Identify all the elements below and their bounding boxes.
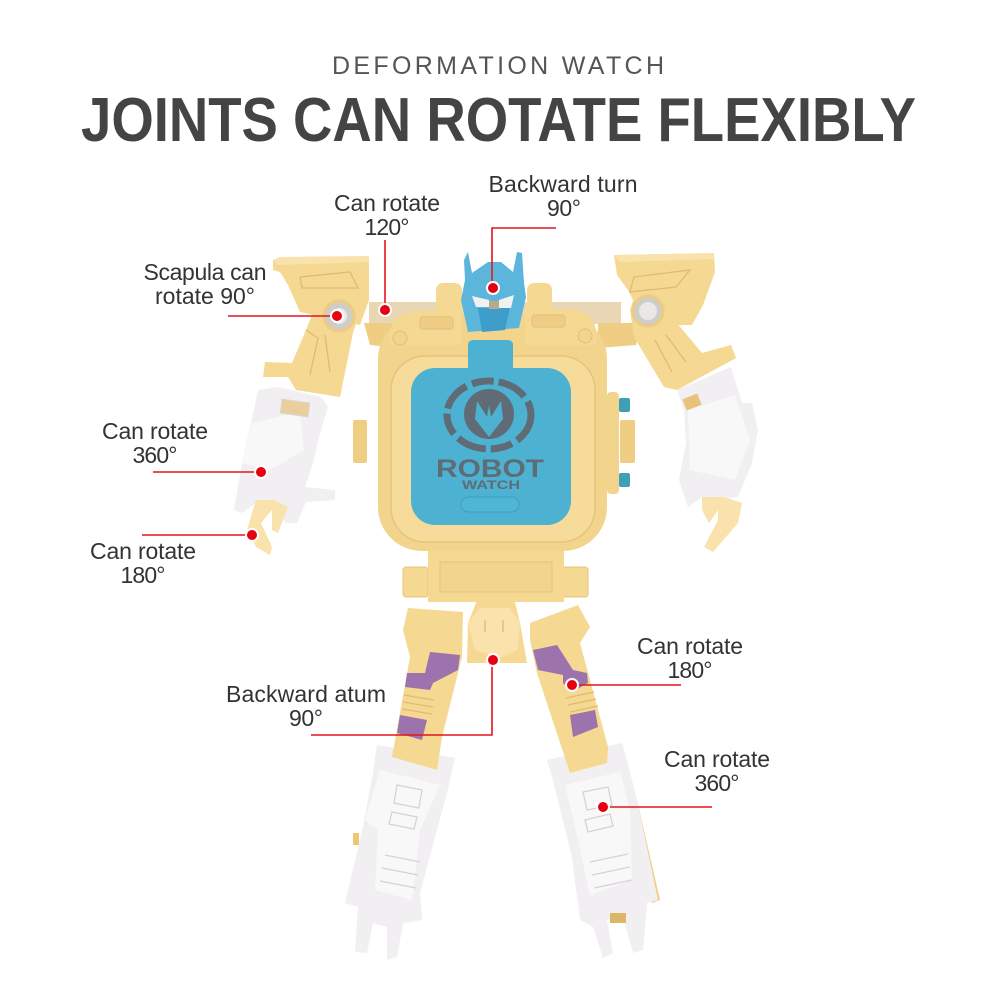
- callout: forearm 360: 360°: [132, 442, 178, 468]
- subtitle: DEFORMATION WATCH: [332, 52, 664, 80]
- callout: backward atum: 90°: [289, 705, 323, 731]
- legs: [345, 598, 660, 960]
- callout: hand 180: 180°: [120, 562, 166, 588]
- left purple panels: [397, 652, 460, 740]
- upper shoulder bumps: [436, 283, 552, 323]
- callout: can rotate 120: [334, 190, 440, 316]
- head: [461, 252, 526, 332]
- shoulder tabs: [389, 306, 597, 345]
- callout: forearm 360: Can rotate: [102, 418, 208, 444]
- side buttons: [353, 392, 635, 494]
- right arm: [614, 253, 758, 552]
- callout: scapula: Scapula can: [144, 259, 266, 285]
- left arm: [234, 256, 369, 555]
- callout: knee 180: [566, 633, 743, 691]
- robot toy illustration: [234, 252, 758, 960]
- left boot: [345, 745, 455, 960]
- callout: hand 180: [90, 529, 258, 588]
- logo text: [436, 455, 544, 492]
- pill button: [461, 497, 519, 512]
- callout: backward turn head: 90°: [547, 195, 581, 221]
- callout: can rotate 120: Can rotate: [334, 190, 440, 216]
- shoulder bar: [364, 302, 641, 348]
- callout: backward atum: Backward atum: [226, 681, 386, 707]
- right purple panels: [533, 645, 598, 737]
- callout: hand 180: Can rotate: [90, 538, 196, 564]
- robot logo: [447, 381, 531, 449]
- blue watch face: [411, 368, 571, 525]
- callout: backward turn head: Backward turn: [488, 171, 638, 197]
- callout: backward atum: [226, 654, 499, 735]
- callout: forearm 360: [102, 418, 267, 478]
- watch body: [353, 252, 635, 602]
- blue flip tab: [468, 340, 513, 368]
- callout: foot 360: Can rotate: [664, 746, 770, 772]
- waist: [403, 540, 588, 602]
- callout: scapula: rotate 90°: [155, 283, 255, 309]
- callout: foot 360: 360°: [694, 770, 740, 796]
- logo text: ROBOT: [436, 455, 544, 483]
- callout: knee 180: 180°: [668, 657, 712, 683]
- logo text: WATCH: [462, 478, 520, 492]
- crotch plate: [467, 598, 527, 663]
- callout: foot 360: [597, 746, 770, 813]
- callout: can rotate 120: 120°: [364, 214, 410, 240]
- callout: backward turn head: [487, 171, 638, 294]
- right boot: [547, 743, 660, 958]
- watch case: [378, 315, 607, 551]
- callout: scapula: [144, 259, 343, 322]
- callout: knee 180: Can rotate: [637, 633, 743, 659]
